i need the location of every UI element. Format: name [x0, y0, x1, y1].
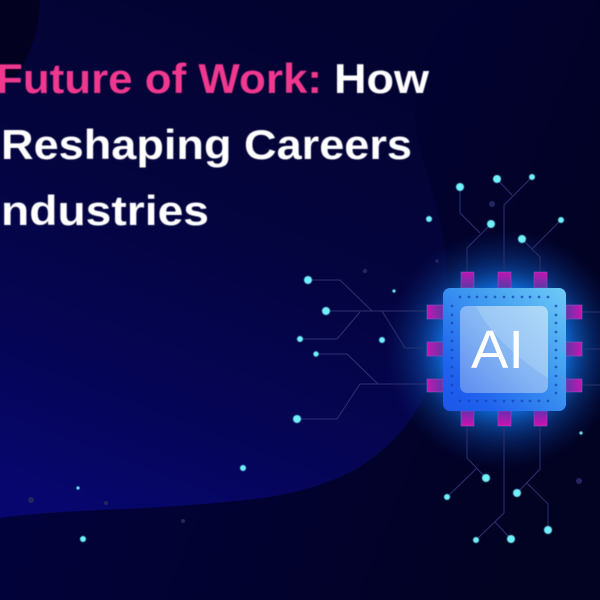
title — [0, 55, 429, 234]
chip body — [443, 288, 566, 411]
title line 3: ndustries — [1, 187, 209, 234]
top-left dark shape — [0, 0, 40, 92]
chip dots — [451, 296, 557, 402]
title line 1 white: How — [334, 55, 429, 102]
background blob — [0, 0, 478, 518]
chip label: AI — [471, 320, 524, 380]
cyan nodes — [76, 174, 583, 543]
chip pins — [427, 272, 582, 426]
title line 1 pink: Future of Work: — [0, 55, 322, 102]
core highlight — [476, 306, 548, 378]
dim nodes — [28, 201, 582, 523]
title line 2: Reshaping Careers — [1, 121, 412, 168]
circuit traces — [297, 177, 600, 540]
chip glow — [384, 229, 600, 469]
chip core — [460, 306, 548, 393]
